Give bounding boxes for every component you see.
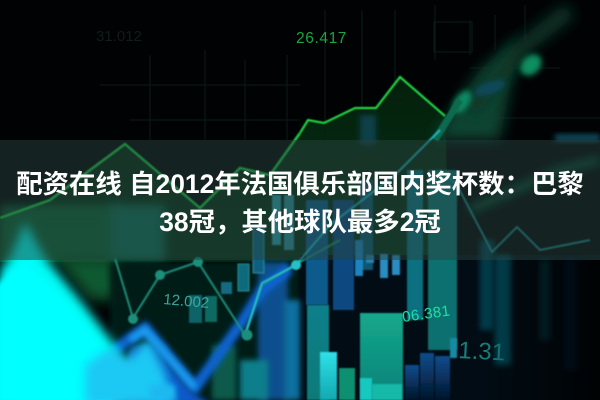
chart number labels: 12.002	[163, 291, 210, 312]
title: 配资在线 自2012年法国俱乐部国内奖杯数：巴黎	[16, 169, 584, 199]
chart number labels: 06.381	[401, 302, 451, 326]
chart number labels: 26.417	[296, 30, 347, 47]
small bars around 12.002	[189, 195, 400, 323]
chart number labels: 31.012	[96, 28, 142, 45]
teal blocks	[307, 305, 457, 400]
green area under upper line	[0, 77, 450, 400]
title: 38冠，其他球队最多2冠	[159, 207, 441, 237]
faint dark-area grid	[100, 5, 600, 140]
title	[16, 169, 584, 237]
right side darkening	[480, 260, 600, 400]
chart number labels	[96, 28, 506, 366]
blurred blue-green mountain line	[0, 222, 290, 400]
chart number labels: 1.31	[458, 337, 506, 366]
teal line chart with nodes	[115, 130, 590, 340]
background bars	[130, 170, 600, 400]
blurred green diagonal streaks	[360, 10, 600, 210]
translucent title band	[0, 140, 600, 260]
upper green line chart	[0, 77, 445, 218]
